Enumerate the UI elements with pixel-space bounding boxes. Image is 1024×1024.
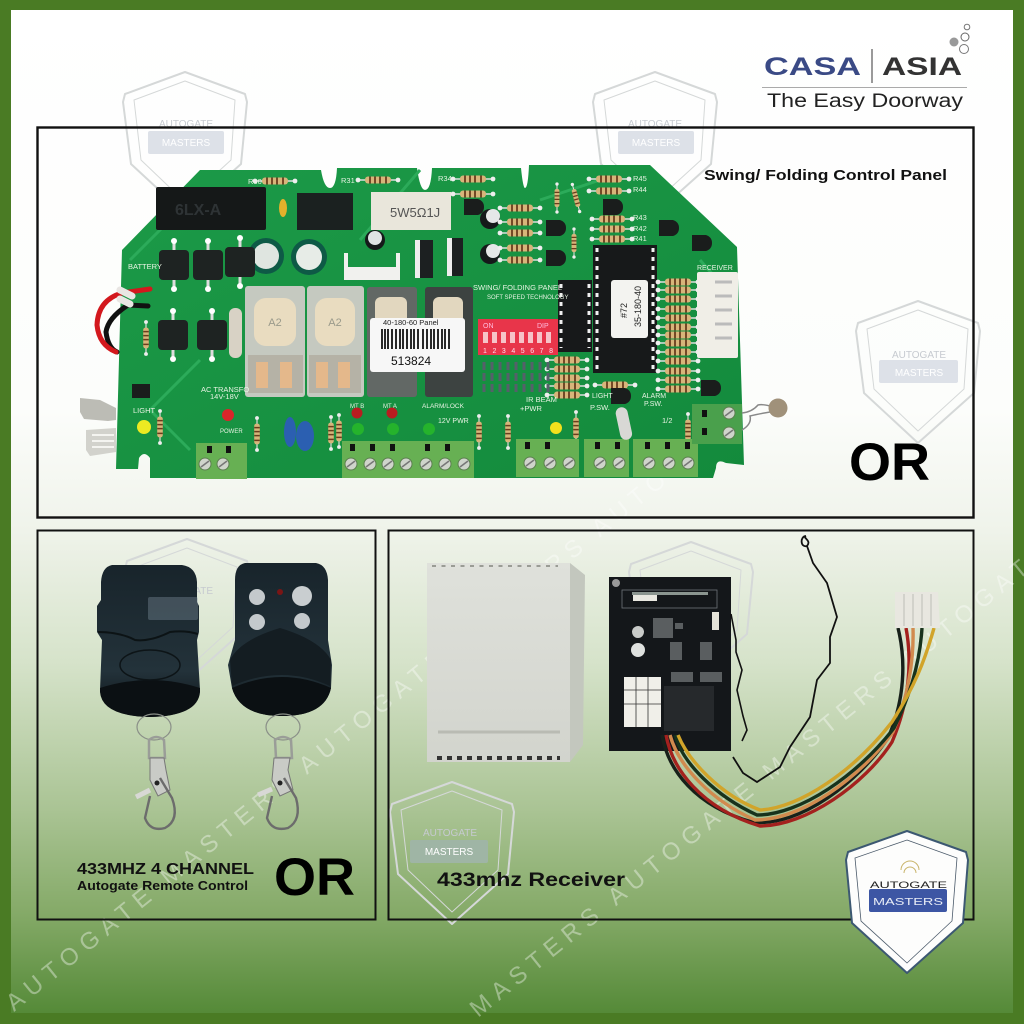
relays [245, 286, 473, 397]
transistors [132, 199, 721, 404]
board labels: RECEIVER [697, 265, 733, 272]
barcode label [370, 318, 465, 372]
board labels: 12V PWR [438, 418, 469, 425]
main IC with label: #72 [619, 303, 629, 318]
light sensor [742, 398, 788, 430]
board labels: P.SW. [590, 403, 610, 412]
OR label: OR [849, 433, 930, 492]
panel: receiver [388, 530, 974, 920]
board labels: IR BEAM [526, 395, 557, 404]
board labels: AC TRANSFO [201, 385, 249, 394]
board labels: ALARM/LOCK [422, 403, 465, 410]
TO-220 parts [415, 238, 463, 278]
board labels: POWER [220, 429, 243, 435]
receiver board [609, 577, 731, 751]
panel: swing/folding control panel [38, 128, 974, 518]
circuit board [97, 165, 788, 479]
remote caption: 433MHZ 4 CHANNEL [77, 861, 254, 878]
board labels [128, 174, 733, 435]
board labels: SWING/ FOLDING PANEL [473, 283, 562, 292]
remote caption: Autogate Remote Control [77, 878, 248, 893]
logo: Casa Asia: ASIA [882, 53, 962, 81]
board labels: 1/2 [662, 416, 672, 425]
white wire connector [895, 592, 940, 628]
ceramic resistor [229, 308, 633, 441]
board antenna wire [731, 614, 747, 741]
watermark shields and diagonal text: MASTERS [632, 138, 680, 149]
heading: panel title: Swing/ Folding Control Panel [704, 167, 947, 184]
fuse [279, 199, 287, 217]
board labels: R43 [633, 213, 647, 222]
board labels: MT A [383, 404, 397, 410]
logo: Autogate Masters shield [846, 831, 968, 973]
logo: Casa Asia [762, 24, 970, 112]
barcode label: 40-180-60 Panel [383, 318, 439, 327]
logo: Autogate Masters shield: AUTOGATE [870, 880, 947, 891]
remote: plain [97, 565, 200, 717]
board labels: R31 [341, 176, 355, 185]
barcode label: 513824 [391, 354, 431, 368]
board labels: R44 [633, 185, 647, 194]
terminal blocks [196, 404, 742, 479]
board labels: SOFT SPEED TECHNOLOGY [487, 295, 568, 301]
diodes [158, 235, 255, 362]
board labels: R41 [633, 234, 647, 243]
black regulator block [297, 193, 353, 230]
watermark shields and diagonal text: AUTOGATE [423, 828, 477, 839]
capacitors [248, 209, 500, 275]
main IC with label [593, 245, 657, 373]
watermark shields and diagonal text: MASTERS [162, 138, 210, 149]
board labels: 14V-18V [210, 392, 239, 401]
board labels: R30 [248, 177, 262, 186]
LEDs [137, 408, 562, 435]
main IC with label: 35-180-40 [633, 286, 643, 327]
heat sink [344, 253, 400, 280]
board labels: R42 [633, 224, 647, 233]
relays: A2 [328, 317, 342, 329]
panel: remote controls [38, 530, 376, 920]
receiver connector [697, 272, 738, 358]
receiver caption: 433mhz Receiver [437, 870, 626, 891]
OR label: OR [274, 848, 355, 907]
watermark shields and diagonal text: MASTERS [425, 847, 473, 858]
board labels: R45 [633, 174, 647, 183]
watermark shields and diagonal text: AUTOGATE MASTERS AUTOGATE MASTERS AUTOGATE [1, 404, 748, 1017]
DIP switch [478, 319, 558, 355]
coiled antenna [733, 536, 837, 782]
remote: four button [228, 563, 332, 716]
board labels: LIGHT [133, 406, 156, 415]
keychains [136, 714, 300, 829]
DIP switch: 1 2 3 4 5 6 7 8 [483, 348, 553, 355]
board labels: P.SW. [644, 401, 663, 408]
battery wires [97, 289, 150, 352]
watermark shields and diagonal text: MASTERS [895, 368, 943, 379]
DIP switch: ON [483, 323, 494, 330]
DIP switch: DIP [537, 323, 549, 330]
white receiver housing [427, 563, 585, 762]
white power resistor: 5W5Ω1J [390, 205, 440, 220]
board labels: ALARM [642, 393, 666, 400]
power-rail diode column [484, 362, 548, 392]
board labels: BATTERY [128, 262, 162, 271]
logo: Casa Asia: CASA [764, 53, 861, 81]
board labels: R34 [438, 174, 452, 183]
copper pour traces [130, 170, 735, 450]
wire harness [662, 628, 934, 826]
spade terminals [80, 398, 116, 456]
board labels: +PWR [520, 404, 542, 413]
watermark shields and diagonal text: AUTOGATE [159, 586, 213, 597]
small IC [558, 280, 592, 352]
board labels: LIGHT [592, 393, 613, 400]
top-left black relay [156, 187, 266, 230]
varistors [284, 417, 314, 451]
logo: Casa Asia: The Easy Doorway [767, 91, 964, 112]
board outline [116, 165, 744, 478]
watermark shields and diagonal text: AUTOGATE [159, 119, 213, 130]
relays: A2 [268, 317, 282, 329]
watermark shields and diagonal text: AUTOGATE [628, 119, 682, 130]
watermark shields and diagonal text: AUTOGATE [892, 350, 946, 361]
logo: Autogate Masters shield: MASTERS [873, 897, 943, 908]
white power resistor [371, 192, 451, 230]
resistor field [143, 176, 700, 452]
remote caption [77, 861, 254, 893]
board labels: MT B [350, 404, 364, 410]
top-left black relay: 6LX-A [175, 202, 222, 219]
